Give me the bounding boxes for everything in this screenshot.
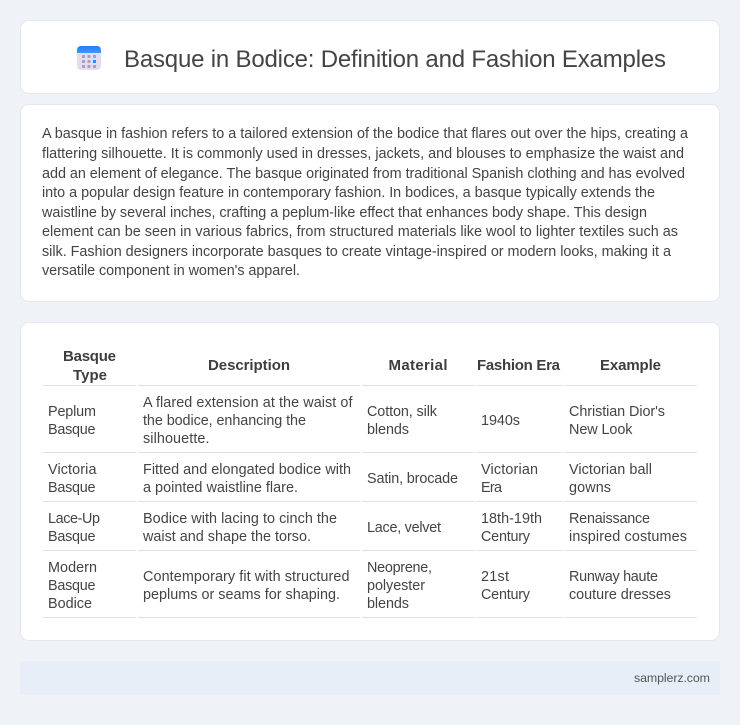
table row: Peplum Basque: silhouette. (143, 431, 210, 447)
table row: Modern Basque Bodice (48, 560, 671, 612)
table row: Modern Basque Bodice: couture dresses (569, 587, 671, 603)
table row: Peplum Basque: New Look (569, 422, 633, 438)
table row: Victoria Basque: Victorian ball (569, 462, 652, 478)
table row: Lace-Up Basque: waist and shape the torso. (142, 529, 311, 545)
table row: Lace-Up Basque: inspired costumes (569, 529, 687, 545)
table row: Victoria Basque: Satin, brocade (367, 471, 458, 487)
footer bar (20, 661, 720, 695)
table row: Peplum Basque: Christian Dior's (569, 404, 665, 420)
table row: Modern Basque Bodice: Bodice (48, 596, 92, 612)
table row: Lace-Up Basque: Basque (48, 529, 96, 545)
table row: Lace-Up Basque: Renaissance (569, 511, 650, 527)
table row: Victoria Basque: Victorian (481, 462, 538, 478)
table header row: Example (600, 357, 661, 374)
table row: Victoria Basque: Victoria (48, 462, 96, 478)
table row: Peplum Basque (48, 395, 665, 447)
table row: Modern Basque Bodice: Century (481, 587, 531, 603)
table row: Peplum Basque: Peplum (48, 404, 96, 420)
text block: definition paragraph: waistline by several inches, crafting a peplum-like effect that enhances body shape. This design (41, 205, 647, 221)
table row: Lace-Up Basque: Bodice with lacing to cinch the (143, 511, 337, 527)
table row: Peplum Basque: Cotton, silk (367, 404, 438, 420)
table row: Lace-Up Basque: Lace-Up (48, 511, 100, 527)
table header row (63, 348, 661, 384)
table row: Modern Basque Bodice: Basque (48, 578, 96, 594)
table row: Modern Basque Bodice: polyester (367, 578, 425, 594)
panel: definition text (20, 104, 720, 302)
table row: Modern Basque Bodice: peplums or seams for shaping. (143, 587, 340, 603)
text block: definition paragraph: A basque in fashion refers to a tailored extension of the bodice that flares out over the hips, creating a (42, 126, 688, 142)
table row: Peplum Basque: the bodice, enhancing the (143, 413, 306, 429)
table row: Modern Basque Bodice: Neoprene, (367, 560, 432, 576)
table row: Lace-Up Basque: Lace, velvet (367, 520, 441, 536)
panel: title header (20, 20, 720, 94)
footer source text: samplerz.com (634, 671, 710, 685)
text block: definition paragraph: flattering silhouette. It is commonly used in dresses, jackets, and blouses to emphasize the waist and (42, 146, 684, 162)
panel: basque types table (20, 322, 720, 640)
table row: Lace-Up Basque (48, 511, 687, 545)
text block: definition paragraph: silk. Fashion designers incorporate basques to create vintage-inspired or modern looks, making it a (42, 244, 671, 260)
title: Basque in Bodice: Definition and Fashion Examples (124, 46, 666, 73)
table row: Peplum Basque: Basque (48, 422, 96, 438)
table row: Peplum Basque: 1940s (481, 413, 520, 429)
table row: Modern Basque Bodice: blends (367, 596, 409, 612)
text block: definition paragraph (41, 126, 688, 279)
table row: Lace-Up Basque: Century (481, 529, 531, 545)
text block: definition paragraph: into a popular design feature in contemporary fashion. In bodices, a basque typically extends the (42, 185, 655, 201)
text block: definition paragraph: versatile component in women's apparel. (42, 263, 300, 279)
table header row: Description (208, 357, 290, 374)
table row: Peplum Basque: blends (367, 422, 409, 438)
table row: Modern Basque Bodice: Modern (48, 560, 97, 576)
table row: Modern Basque Bodice: Runway haute (569, 569, 658, 585)
text block: definition paragraph: add an element of elegance. The basque originated from traditional Spanish clothing and has evolved (42, 166, 685, 182)
table header row: Fashion Era (477, 357, 561, 374)
table header row: Type (73, 367, 107, 384)
table row: Victoria Basque: Basque (48, 480, 96, 496)
table row: Victoria Basque: gowns (569, 480, 611, 496)
table row: Modern Basque Bodice: Contemporary fit with structured (143, 569, 350, 585)
table row: Victoria Basque (48, 462, 652, 496)
table header row: Basque (63, 348, 116, 365)
icon: calendar (77, 46, 101, 70)
table header row: Material (388, 357, 448, 374)
table row: Modern Basque Bodice: 21st (481, 569, 509, 585)
table row: Victoria Basque: Era (481, 480, 502, 496)
text block: definition paragraph: element can be seen in various fabrics, from structured materials like wool to lighter textiles such as (42, 224, 678, 240)
table rules (43, 386, 697, 618)
table row: Peplum Basque: A flared extension at the waist of (143, 395, 354, 411)
table row: Victoria Basque: Fitted and elongated bodice with (143, 462, 351, 478)
table row: Victoria Basque: a pointed waistline flare. (143, 480, 298, 496)
table row: Lace-Up Basque: 18th-19th (481, 511, 542, 527)
